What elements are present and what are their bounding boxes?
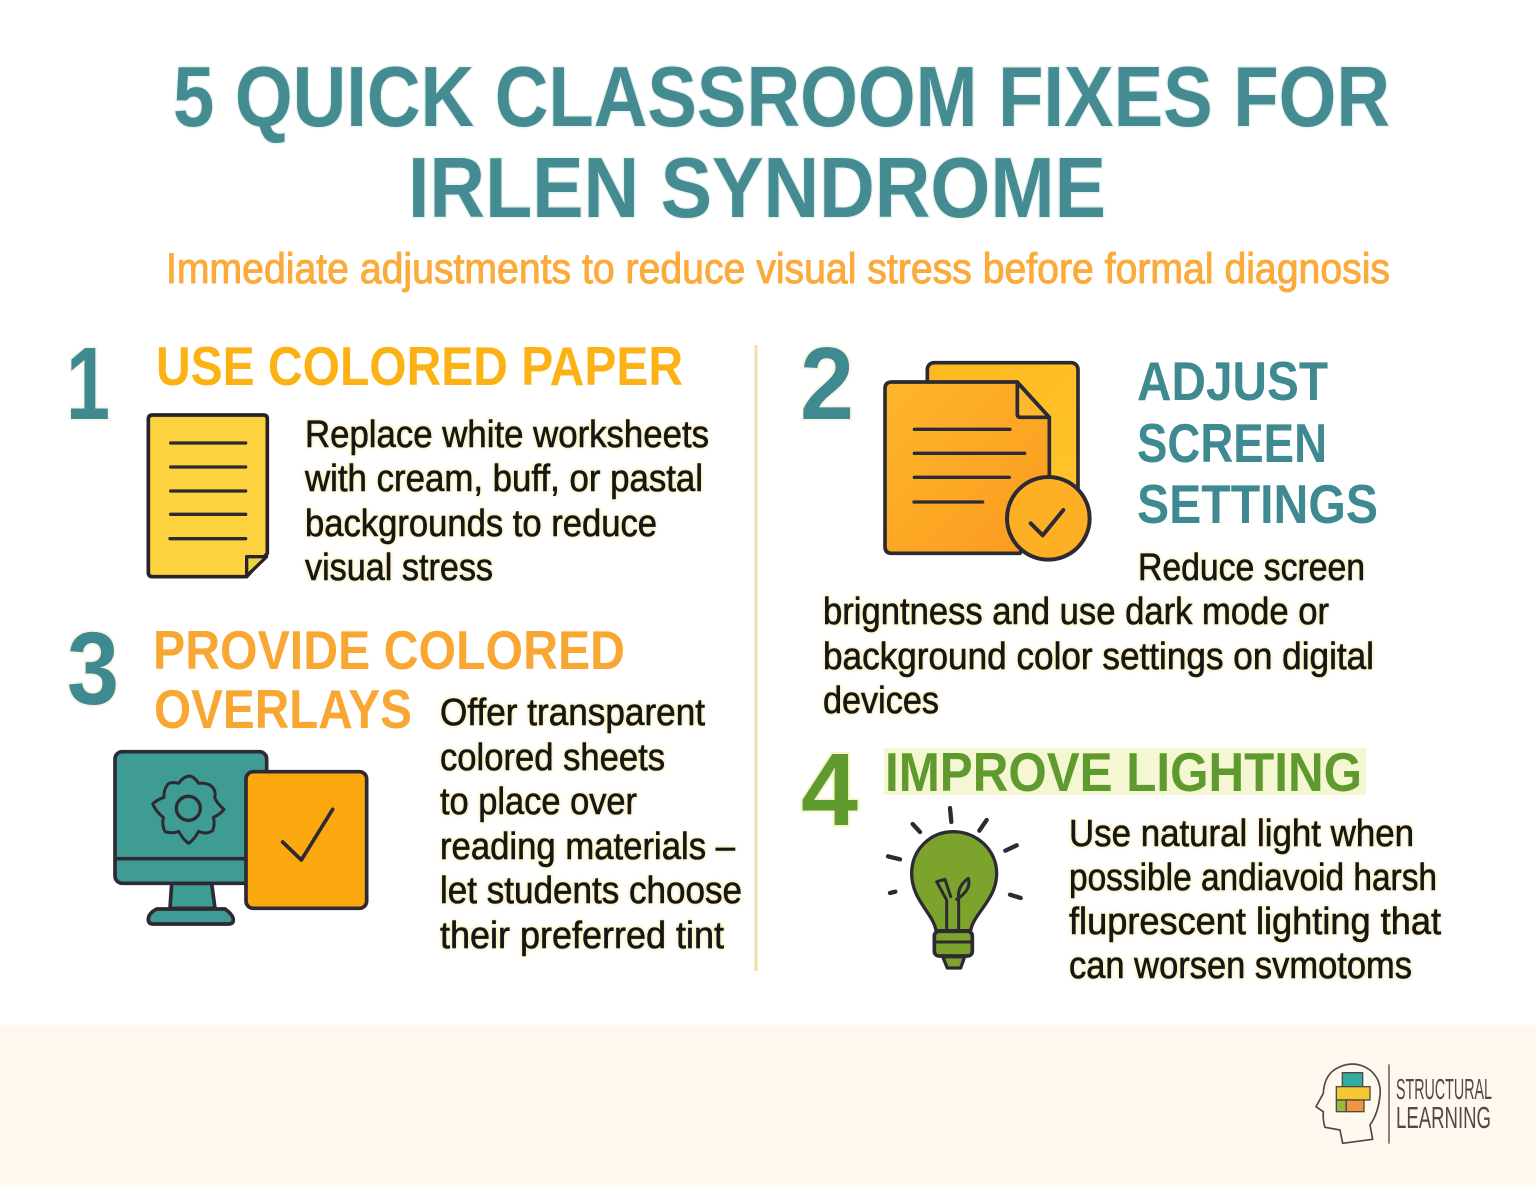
body text 1: visual stress (305, 547, 493, 589)
body text 1: Replace white worksheets (305, 414, 709, 456)
body text 4: fluprescent lighting that (1069, 901, 1441, 943)
heading: provide colored overlays: PROVIDE COLORED (153, 619, 625, 681)
panel: fix 4 improve lighting (801, 732, 1441, 987)
number 2: 2 (800, 326, 854, 441)
title (173, 50, 1390, 236)
body text 1: backgrounds to reduce (305, 503, 657, 545)
body text 3: let students choose (440, 870, 742, 912)
icon: yellow document (148, 415, 267, 577)
body text 3: reading materials – (440, 826, 736, 868)
body text 1: with cream, buff, or pastal (304, 458, 703, 500)
icon: head with blocks (1316, 1064, 1390, 1144)
panel: fix 1 colored paper (66, 326, 709, 589)
body text 3: Offer transparent (440, 692, 705, 734)
title: IRLEN SYNDROME (408, 141, 1106, 236)
heading: provide colored overlays (153, 619, 625, 740)
footer band (0, 1025, 1536, 1187)
panel: fix 2 screen settings (800, 326, 1378, 722)
body text 3: their preferred tint (440, 915, 724, 957)
heading: adjust screen settings: ADJUST (1137, 350, 1328, 412)
heading: improve lighting: IMPROVE LIGHTING (885, 741, 1362, 803)
body text 2 (823, 547, 1374, 722)
heading: provide colored overlays: OVERLAYS (154, 678, 412, 740)
body text 4: Use natural light when (1069, 813, 1414, 855)
body text 4: can worsen svmotoms (1069, 945, 1412, 987)
body text 1 (304, 414, 709, 589)
logo: structural learning (1316, 1064, 1492, 1144)
body text 4: possible andiavoid harsh (1069, 857, 1437, 899)
heading: use colored paper: USE COLORED PAPER (156, 335, 683, 397)
body text 2: brigntness and use dark mode or (823, 591, 1329, 633)
icon: monitor with check card (115, 752, 367, 924)
icon: documents with check badge (885, 363, 1090, 560)
heading: adjust screen settings: SCREEN (1137, 412, 1327, 474)
body text 2: Reduce screen (1138, 547, 1365, 589)
subtitle: Immediate adjustments to reduce visual stress before formal diagnosis (166, 245, 1390, 293)
body text 2: devices (823, 680, 939, 722)
title: 5 QUICK CLASSROOM FIXES FOR (173, 50, 1390, 145)
number 1: 1 (66, 326, 110, 441)
number 4: 4 (801, 732, 858, 847)
number 3: 3 (67, 611, 119, 726)
icon: light bulb (888, 808, 1021, 968)
heading: adjust screen settings: SETTINGS (1137, 473, 1378, 535)
body text 3 (440, 692, 742, 957)
logo wordmark (1396, 1074, 1492, 1135)
center divider (754, 345, 758, 971)
heading: adjust screen settings (1137, 350, 1378, 535)
panel: fix 3 colored overlays (67, 611, 742, 957)
body text 3: to place over (440, 781, 637, 823)
body text 4 (1069, 813, 1441, 987)
body text 3: colored sheets (440, 737, 665, 779)
body text 2: background color settings on digital (823, 636, 1374, 678)
